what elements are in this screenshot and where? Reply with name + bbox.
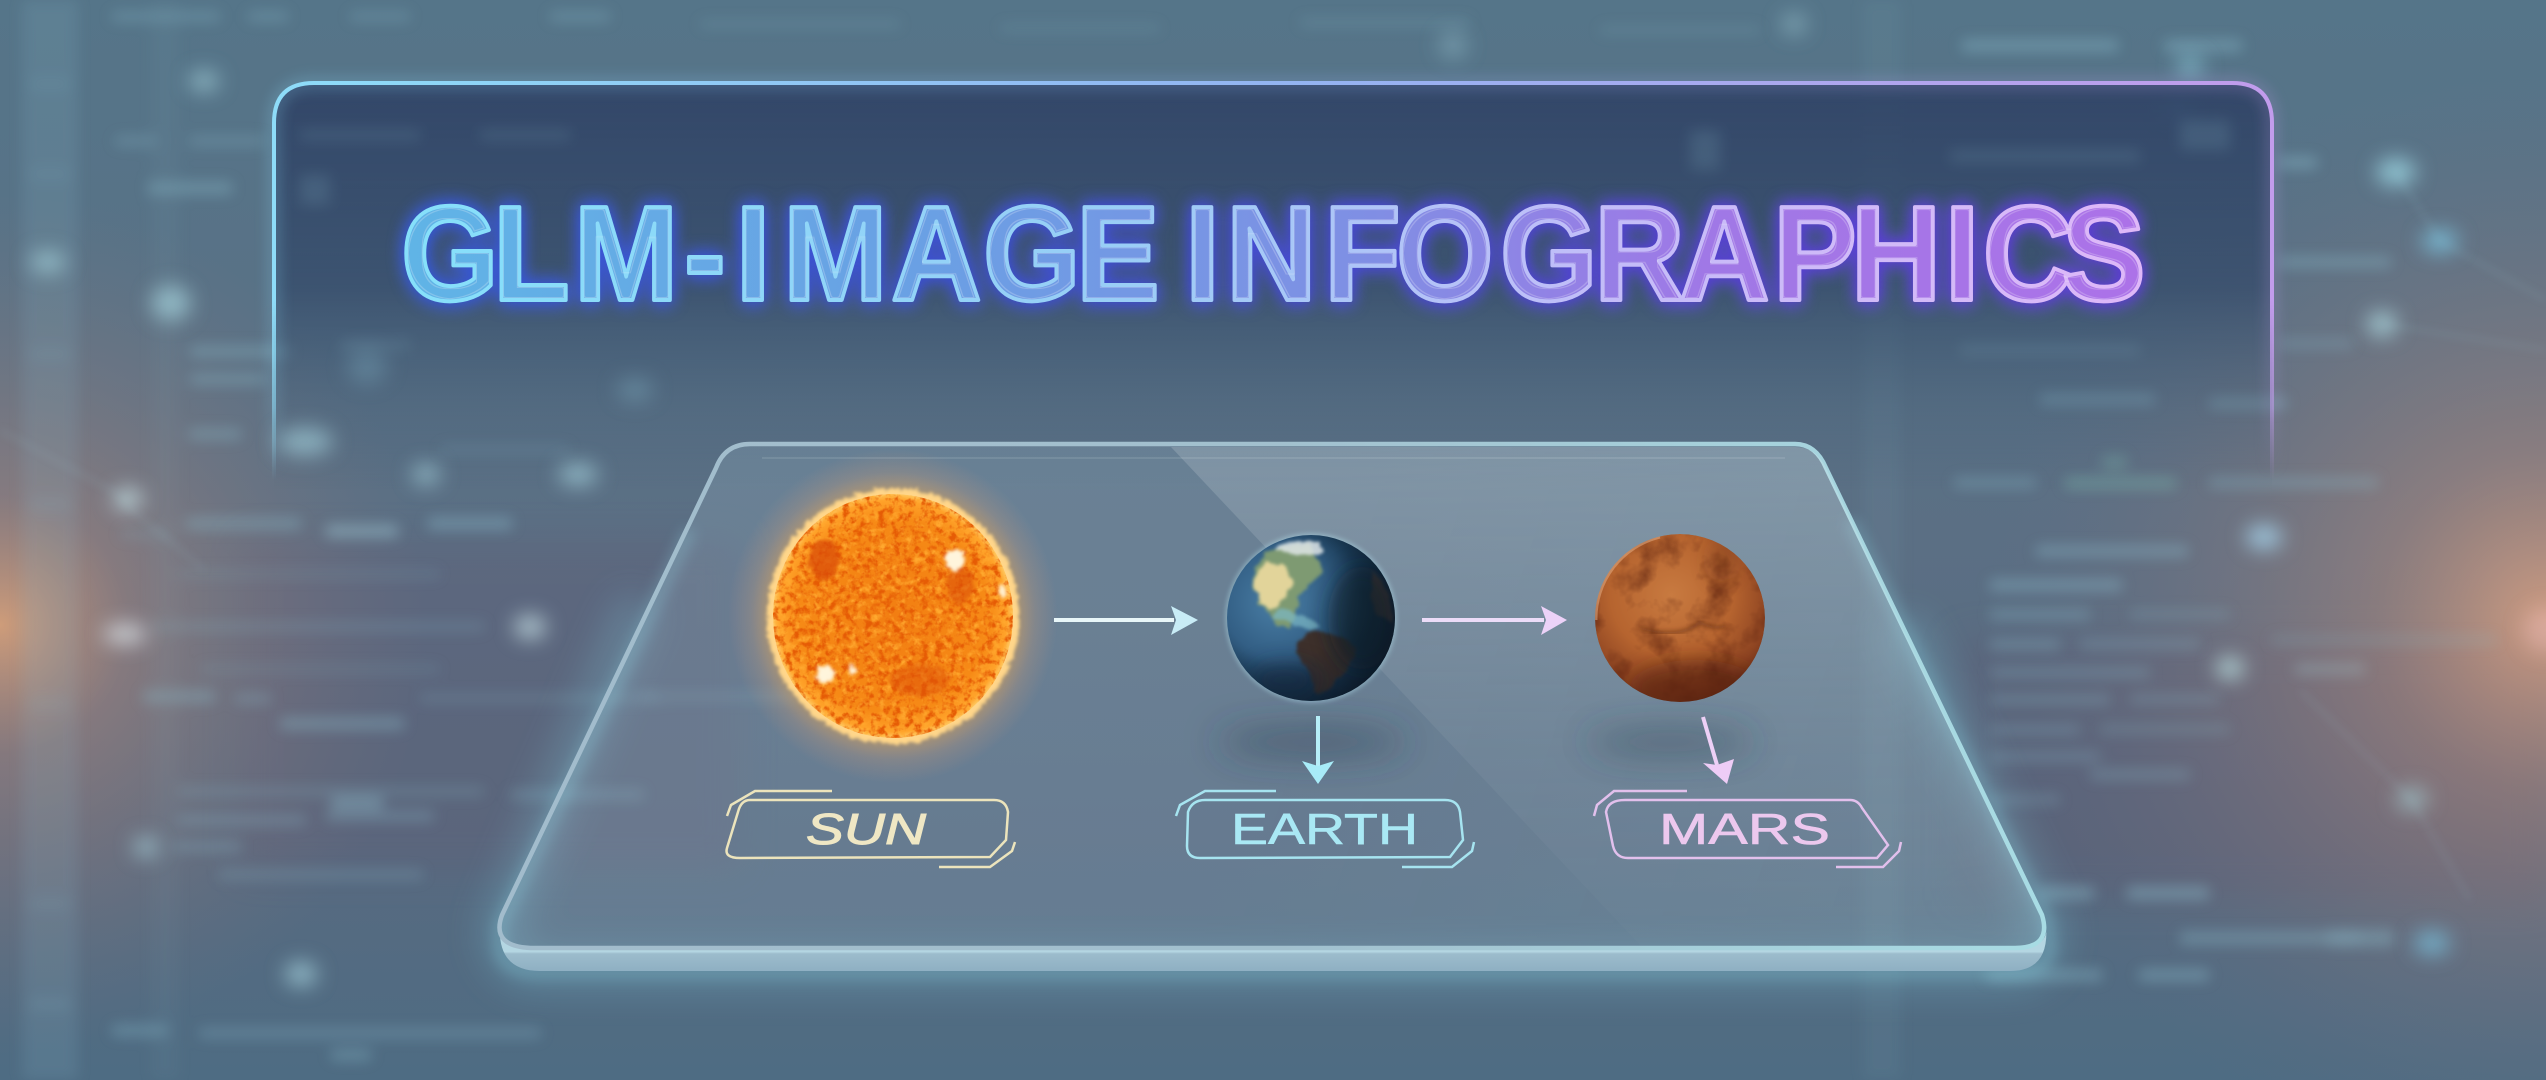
arrow: earth to mars	[1422, 606, 1567, 635]
label text: mars: MARS	[1659, 805, 1830, 854]
title: GLM-IMAGE INFOGRAPHICS	[401, 178, 2146, 329]
label text: sun: SUN	[806, 805, 926, 854]
label: sun	[727, 791, 1015, 867]
shadows under planets	[1217, 728, 1755, 756]
arrow: sun to earth	[1054, 606, 1198, 635]
glass platform	[499, 444, 2050, 972]
title panel: glowing frame	[274, 83, 2272, 490]
icon: earth	[1225, 533, 1397, 703]
icon: sun	[728, 449, 1058, 783]
label text: earth: EARTH	[1231, 805, 1418, 854]
glass sheen	[1171, 447, 2042, 945]
arrow: earth to label	[1302, 716, 1334, 784]
label: earth	[1176, 791, 1474, 867]
arrow: mars to label	[1703, 717, 1734, 784]
icon: mars	[1595, 534, 1765, 716]
label: mars	[1594, 791, 1901, 867]
